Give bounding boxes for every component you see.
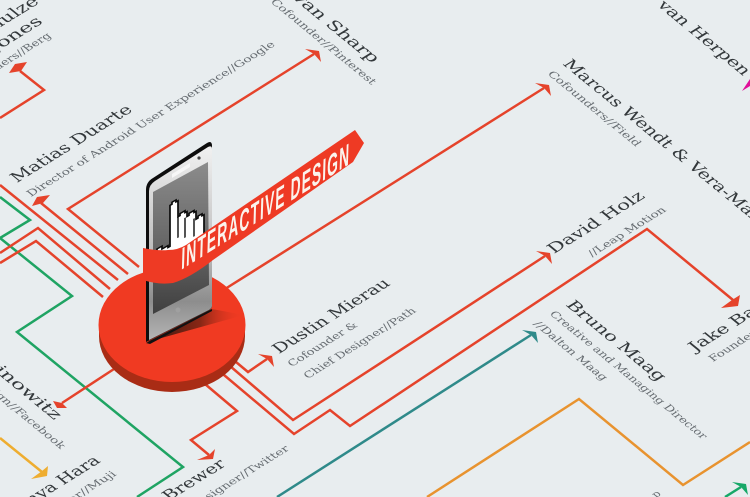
ribbon title: INTERACTIVE DESIGN bbox=[181, 138, 350, 277]
connector: Duarte bbox=[32, 195, 128, 274]
phone bbox=[146, 142, 212, 344]
connector: green lower right bbox=[725, 482, 748, 497]
connector: teal bbox=[277, 330, 538, 497]
label: Matias Duarte bbox=[5, 40, 278, 199]
connector: Dustin Mierau bbox=[236, 354, 274, 372]
label: Marcus Wendt and Vera-Maria Glahn: Cofounders//Field bbox=[544, 69, 644, 149]
connector: Facebook bbox=[53, 369, 114, 408]
phone shadow bbox=[147, 309, 244, 342]
label: Bruno Maag: Creative and Managing Director bbox=[546, 309, 711, 442]
connectors: left bundle bbox=[0, 185, 118, 297]
label: Bruno Maag: //Dalton Maag bbox=[530, 319, 611, 383]
connector: Jake Barton bbox=[224, 229, 740, 434]
disc base bbox=[98, 268, 246, 392]
label: David Holz bbox=[542, 188, 669, 259]
label: Matias Duarte: Director of Android User Experience//Google bbox=[24, 40, 278, 199]
arrow: magenta bbox=[742, 79, 750, 91]
label: Dustin Mierau: Dustin Mierau bbox=[267, 275, 394, 357]
label: Dustin Mierau: Cofounder & bbox=[285, 320, 361, 369]
connector: Twitter bbox=[191, 384, 237, 460]
label: David Holz: //Leap Motion bbox=[585, 205, 669, 259]
label: David Holz: David Holz bbox=[542, 188, 649, 257]
connector: Pinterest bbox=[68, 49, 321, 267]
label: Bruno Maag: Bruno Maag bbox=[562, 297, 671, 384]
label: Brewer bbox=[157, 443, 293, 497]
connector: David Holz bbox=[230, 251, 552, 420]
label: Bruno Maag bbox=[530, 297, 711, 442]
ribbon banner bbox=[143, 130, 364, 284]
label: Jake Barton bbox=[681, 277, 750, 364]
label: Rabinowitz bbox=[0, 335, 69, 451]
label: Dustin Mierau bbox=[267, 275, 419, 381]
connector: orange bbox=[427, 399, 750, 497]
connector: Berg bbox=[0, 62, 44, 118]
label: Matias Duarte: Matias Duarte bbox=[5, 101, 137, 186]
phone screen bbox=[153, 162, 209, 314]
icon: pixel hand cursor bbox=[157, 184, 204, 286]
label: Dustin Mierau: Chief Designer//Path bbox=[301, 306, 419, 381]
label: Schulze and Jones bbox=[0, 0, 55, 95]
connector: gold bbox=[0, 438, 48, 479]
connector: Marcus Wendt bbox=[225, 83, 551, 289]
connector: green line bbox=[0, 197, 183, 497]
